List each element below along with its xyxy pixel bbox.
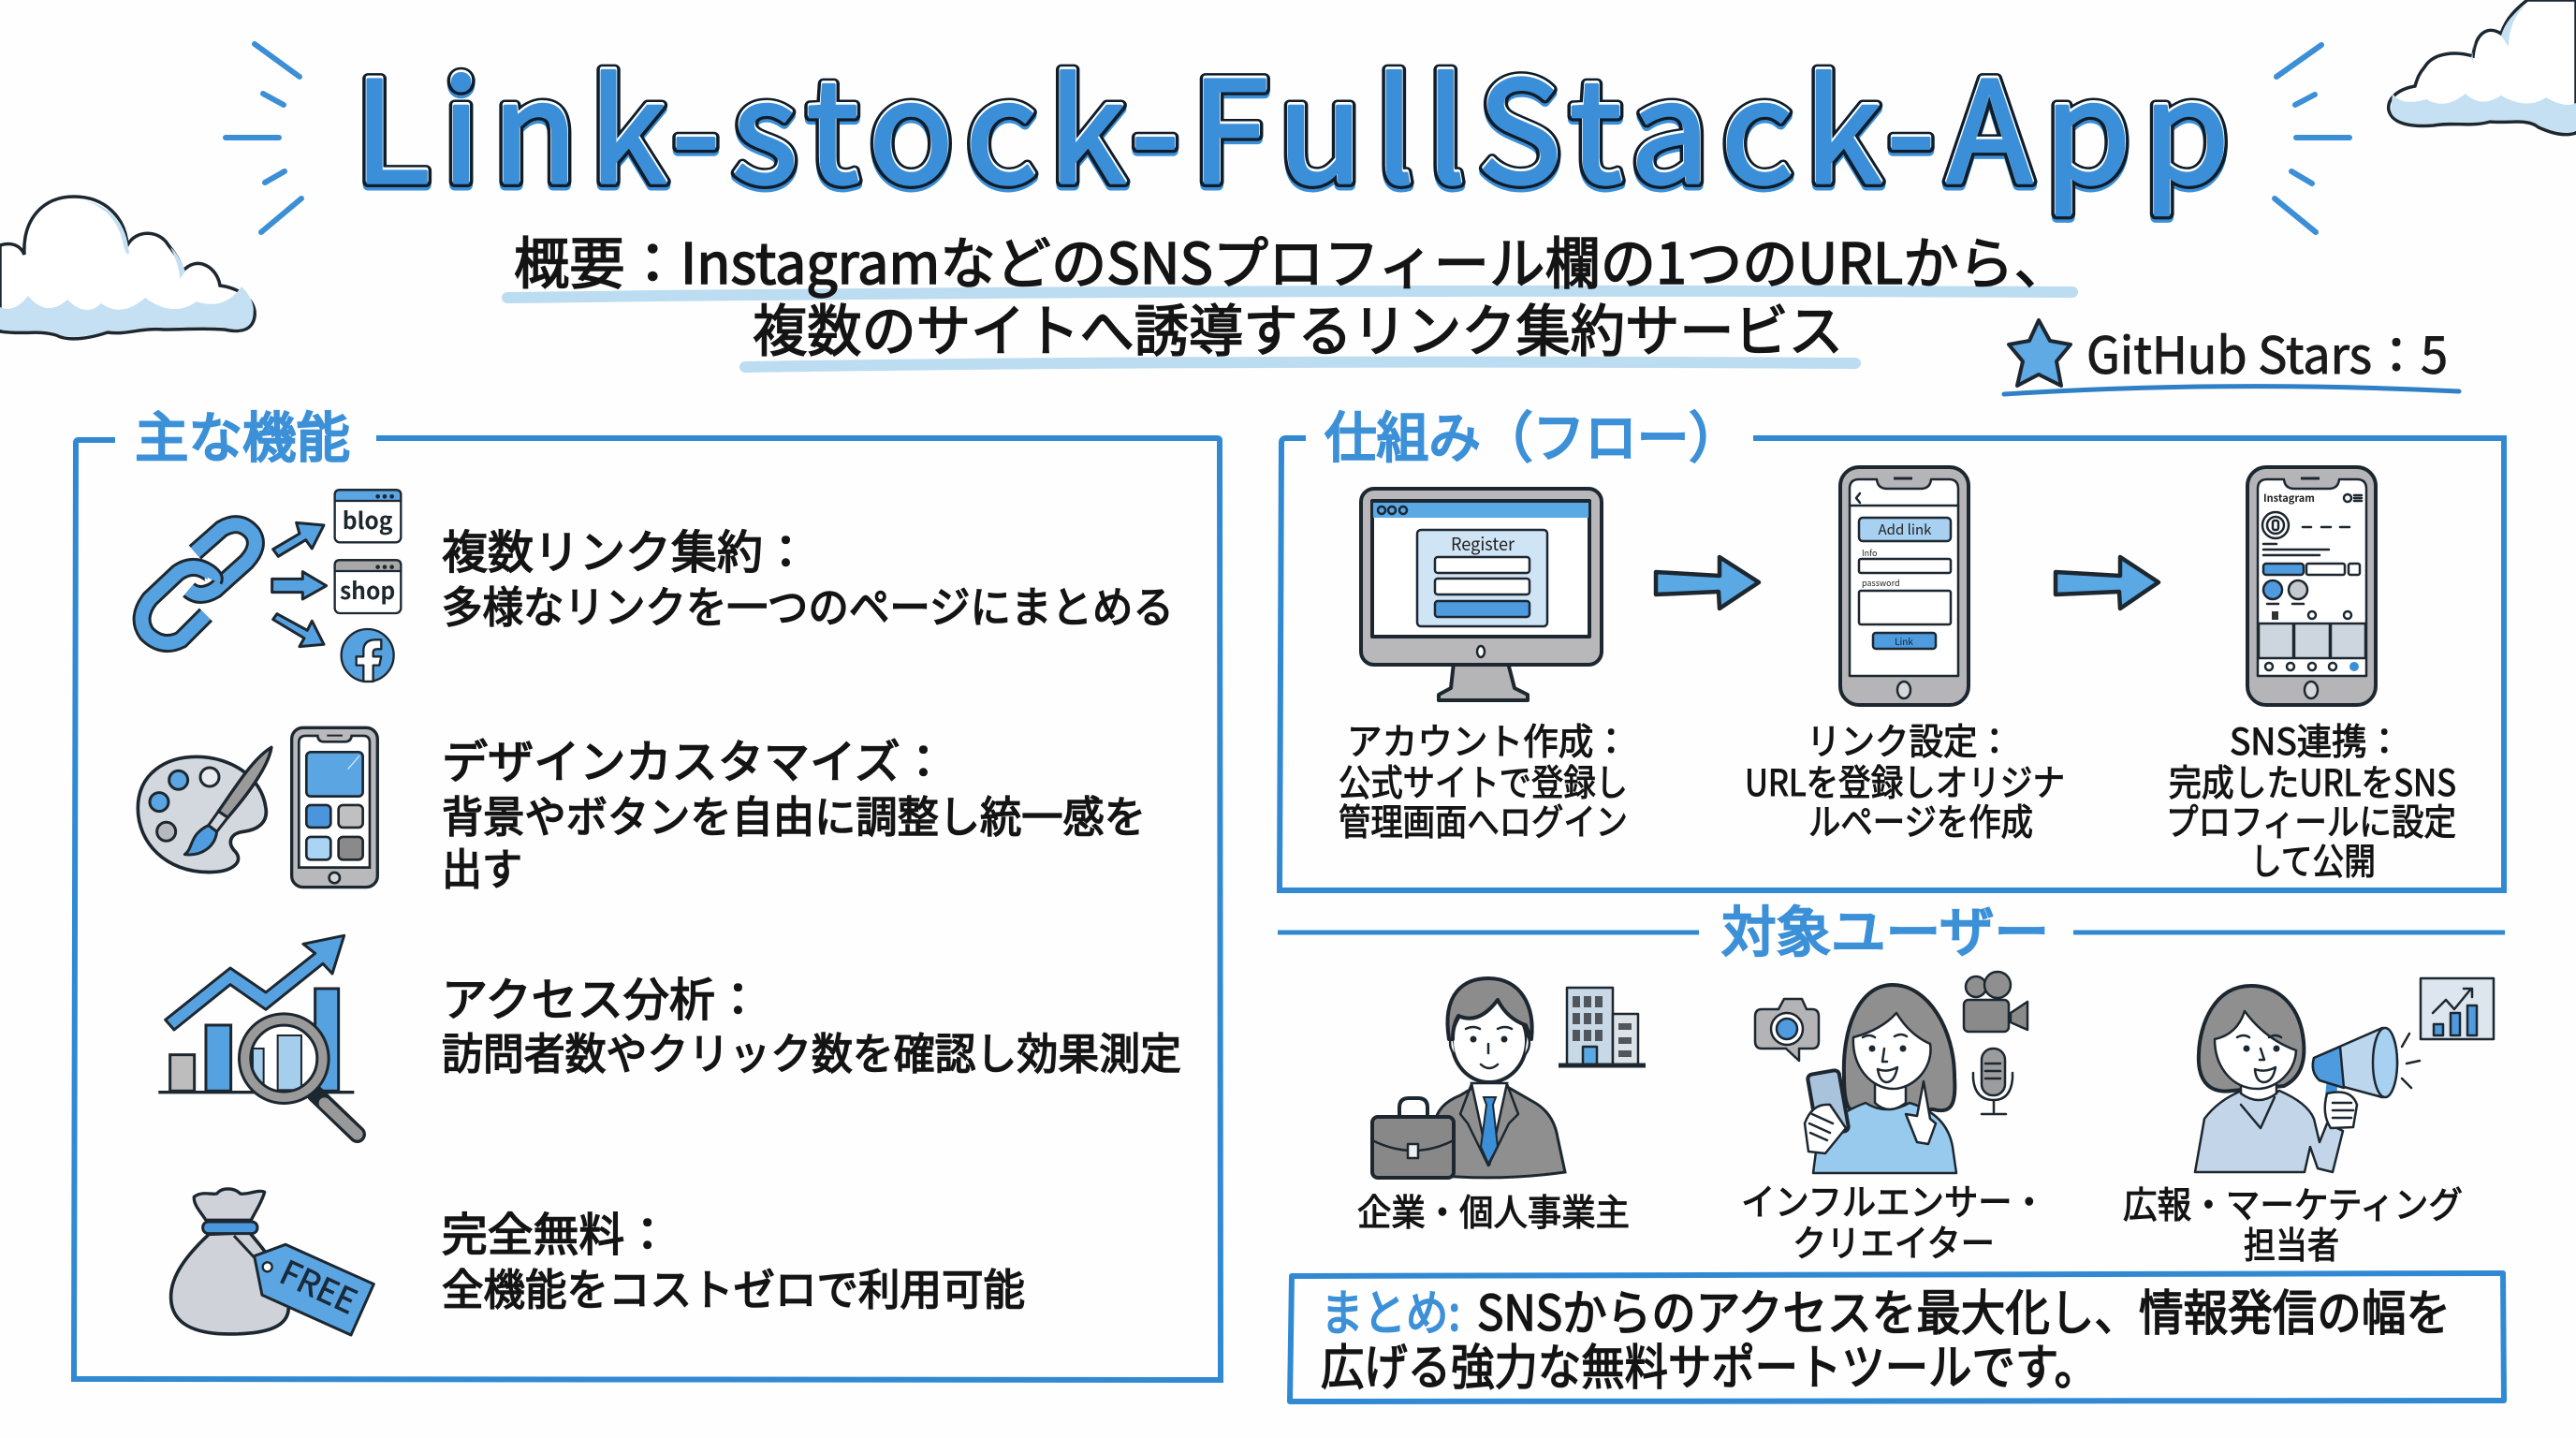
icon: free money bag — [171, 1189, 373, 1335]
user label: marketing: 広報・マーケティング — [2123, 1177, 2463, 1229]
feature text: design customize: 出す — [442, 836, 522, 898]
subtitle with highlight underlines — [507, 219, 2072, 368]
icon: phone add link: Info — [1862, 547, 1877, 559]
icon: businessman — [1372, 978, 1565, 1178]
feature text: multi link: 多様なリンクを一つのページにまとめる — [442, 574, 1174, 636]
icon: palette and phone — [138, 727, 377, 888]
flow step label: link setting: ルページを作成 — [1808, 794, 2033, 846]
icon: free money bag: FREE — [273, 1246, 366, 1324]
user label: influencer: クリエイター — [1793, 1215, 1995, 1268]
icon: link to sites: shop — [340, 573, 395, 607]
cloud: top left — [0, 197, 255, 339]
icon: camera — [1755, 999, 1819, 1061]
flow step label: account — [1339, 713, 1629, 846]
feature text: design customize: 背景やボタンを自由に調整し統一感を — [442, 784, 1146, 845]
flow step label: sns: SNS連携： — [2230, 713, 2402, 766]
icon: phone add link: password — [1862, 577, 1900, 589]
arrow: step 1 to 2 — [1656, 557, 1759, 609]
icon: phone add link: Link — [1895, 634, 1913, 648]
summary text — [1321, 1274, 2451, 1399]
icon: phone profile: Instagram — [2263, 491, 2315, 506]
feature text: multi link — [442, 516, 1174, 636]
summary text: まとめ: — [1321, 1274, 1460, 1344]
icon: influencer — [1805, 985, 1956, 1173]
icon: link to sites — [142, 490, 401, 682]
icon: microphone — [1973, 1049, 2012, 1114]
user label: business: 企業・個人事業主 — [1357, 1184, 1630, 1237]
feature text: design customize: デザインカスタマイズ： — [442, 726, 946, 792]
panel: flow — [1280, 394, 2504, 890]
heading: main features: 主な機能 — [135, 394, 350, 473]
icon: phone profile — [2247, 467, 2376, 705]
feature text: design customize — [442, 726, 1146, 898]
feature text: analytics: アクセス分析： — [442, 963, 761, 1030]
panel: summary — [1290, 1273, 2504, 1401]
title: Link-stock-FullStack-App — [354, 20, 2230, 223]
title: Link-stock-FullStack-App — [354, 21, 2230, 224]
icon: marketer — [2195, 986, 2420, 1172]
title: Link-stock-FullStack-App — [354, 19, 2230, 222]
flow step label: link setting: URLを登録しオリジナ — [1745, 755, 2065, 807]
summary text: 広げる強力な無料サポートツールです。 — [1321, 1328, 2098, 1399]
cloud: top right — [2389, 0, 2576, 135]
flow step label: sns: プロフィールに設定 — [2166, 794, 2456, 846]
flow step label: account: アカウント作成： — [1347, 713, 1629, 766]
heading: flow: 仕組み（フロー） — [1325, 394, 1741, 473]
flow step label: account: 公式サイトで登録し — [1339, 755, 1628, 807]
github stars badge: GitHub Stars：5 — [2086, 315, 2448, 389]
subtitle with highlight underlines: 概要：InstagramなどのSNSプロフィール欄の1つのURLから、 — [514, 219, 2070, 301]
user label: marketing: 担当者 — [2244, 1217, 2339, 1269]
feature text: free: 全機能をコストゼロで利用可能 — [442, 1256, 1025, 1318]
icon: analytics chart — [158, 935, 358, 1135]
summary text: SNSからのアクセスを最大化し、情報発信の幅を — [1477, 1274, 2451, 1344]
section: target users — [1278, 888, 2505, 1269]
icon: building — [1559, 988, 1646, 1065]
flow step label: link setting: リンク設定： — [1807, 713, 2012, 766]
icon: link to sites: blog — [343, 503, 393, 536]
icon: phone add link: Add link — [1879, 520, 1932, 539]
icon: report chart — [2421, 978, 2494, 1039]
decorative rays: title right — [2275, 45, 2349, 232]
flow step label: sns: して公開 — [2250, 833, 2376, 886]
feature text: multi link: 複数リンク集約： — [442, 516, 809, 582]
icon: monitor register — [1361, 489, 1602, 700]
feature text: free — [442, 1198, 1025, 1318]
arrow: step 2 to 3 — [2056, 557, 2159, 609]
feature text: analytics — [442, 963, 1181, 1082]
icon: video camera — [1964, 972, 2027, 1032]
subtitle with highlight underlines: 複数のサイトへ誘導するリンク集約サービス — [753, 286, 1843, 368]
user label: marketing — [2123, 1177, 2463, 1269]
user label: influencer — [1741, 1174, 2046, 1268]
title: Link-stock-FullStack-App — [354, 23, 2230, 227]
panel: main features — [74, 394, 1221, 1380]
feature text: analytics: 訪問者数やクリック数を確認し効果測定 — [442, 1020, 1181, 1082]
flow step label: link setting — [1745, 713, 2065, 846]
heading: target users: 対象ユーザー — [1721, 888, 2049, 967]
icon: star — [2009, 320, 2071, 386]
flow step label: account: 管理画面へログイン — [1339, 794, 1628, 846]
icon: monitor register: Register — [1451, 531, 1515, 556]
flow step label: sns — [2166, 713, 2456, 886]
user label: influencer: インフルエンサー・ — [1741, 1174, 2046, 1226]
flow step label: sns: 完成したURLをSNS — [2169, 755, 2456, 807]
feature text: free: 完全無料： — [442, 1198, 670, 1265]
icon: phone add link — [1840, 467, 1969, 705]
decorative rays: title left — [226, 44, 301, 232]
